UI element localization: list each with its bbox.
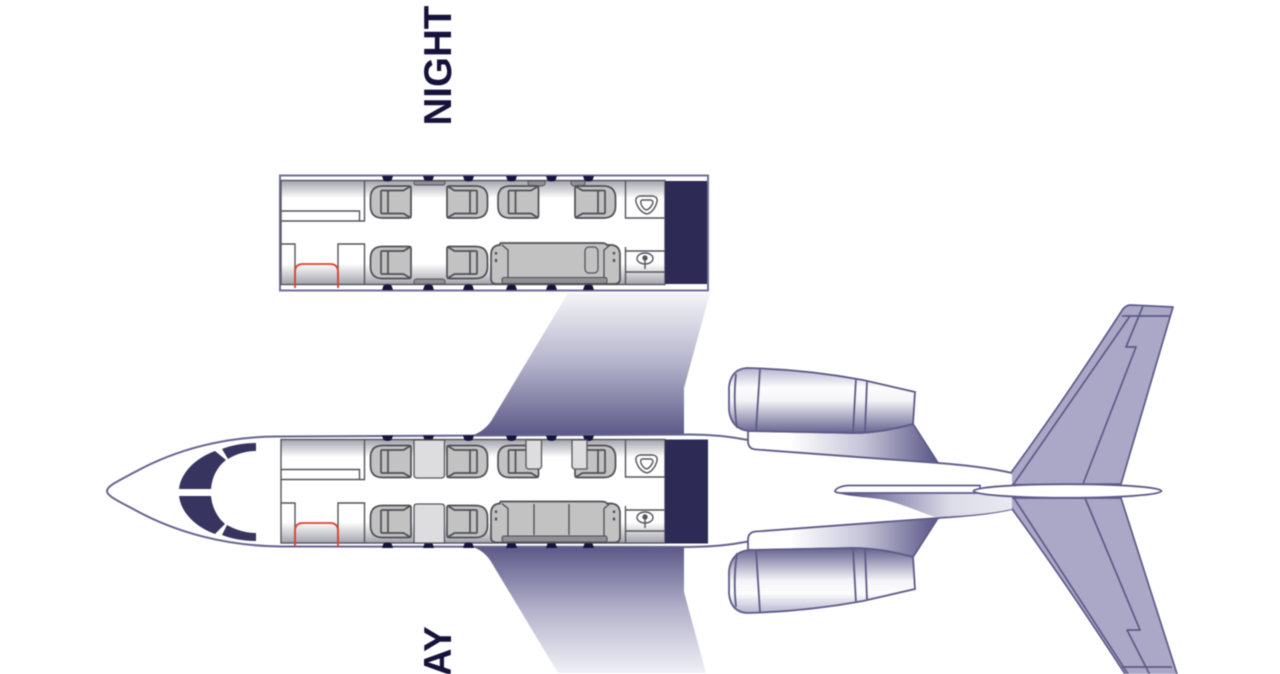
upper projection funnel linking fuselage to night cabin — [470, 293, 710, 436]
upper engine pylon — [748, 424, 938, 463]
lower engine — [729, 548, 915, 613]
cockpit windshield — [179, 443, 256, 541]
panel: day cabin — [281, 436, 708, 548]
day windows — [382, 436, 594, 548]
night cabin floor — [281, 180, 665, 284]
aft fuselage — [930, 463, 1012, 518]
fuselage outline with nose — [107, 434, 748, 547]
night windows — [382, 176, 594, 290]
lower projection funnel below the day cabin — [470, 546, 706, 673]
label: NIGHT: NIGHT — [417, 5, 460, 126]
night seats — [370, 186, 616, 278]
lower engine pylon — [748, 518, 938, 557]
panel: night cabin — [280, 176, 708, 290]
tail: upper stabilizer half — [1002, 305, 1173, 485]
night lavatory — [626, 180, 665, 284]
vertical fin shading — [838, 493, 1012, 517]
day seats — [370, 446, 616, 538]
tail: lower stabilizer half — [1004, 498, 1178, 674]
night dark bulkhead — [665, 181, 707, 284]
day galley and door — [281, 440, 364, 546]
day cabin floor — [281, 440, 665, 543]
horizontal stabilizer centre ellipse — [974, 484, 1162, 498]
day centre tables — [414, 440, 587, 543]
upper engine — [729, 368, 915, 433]
day three-seat divan — [491, 502, 620, 542]
day dark bulkhead — [665, 440, 708, 544]
night folded tables — [414, 181, 585, 284]
aft fuselage outline — [938, 463, 1012, 518]
night galley and door — [281, 180, 364, 288]
night divan — [491, 243, 620, 284]
day lavatory — [626, 440, 665, 543]
vertical fin — [835, 486, 980, 493]
night cabin shell — [280, 176, 708, 290]
